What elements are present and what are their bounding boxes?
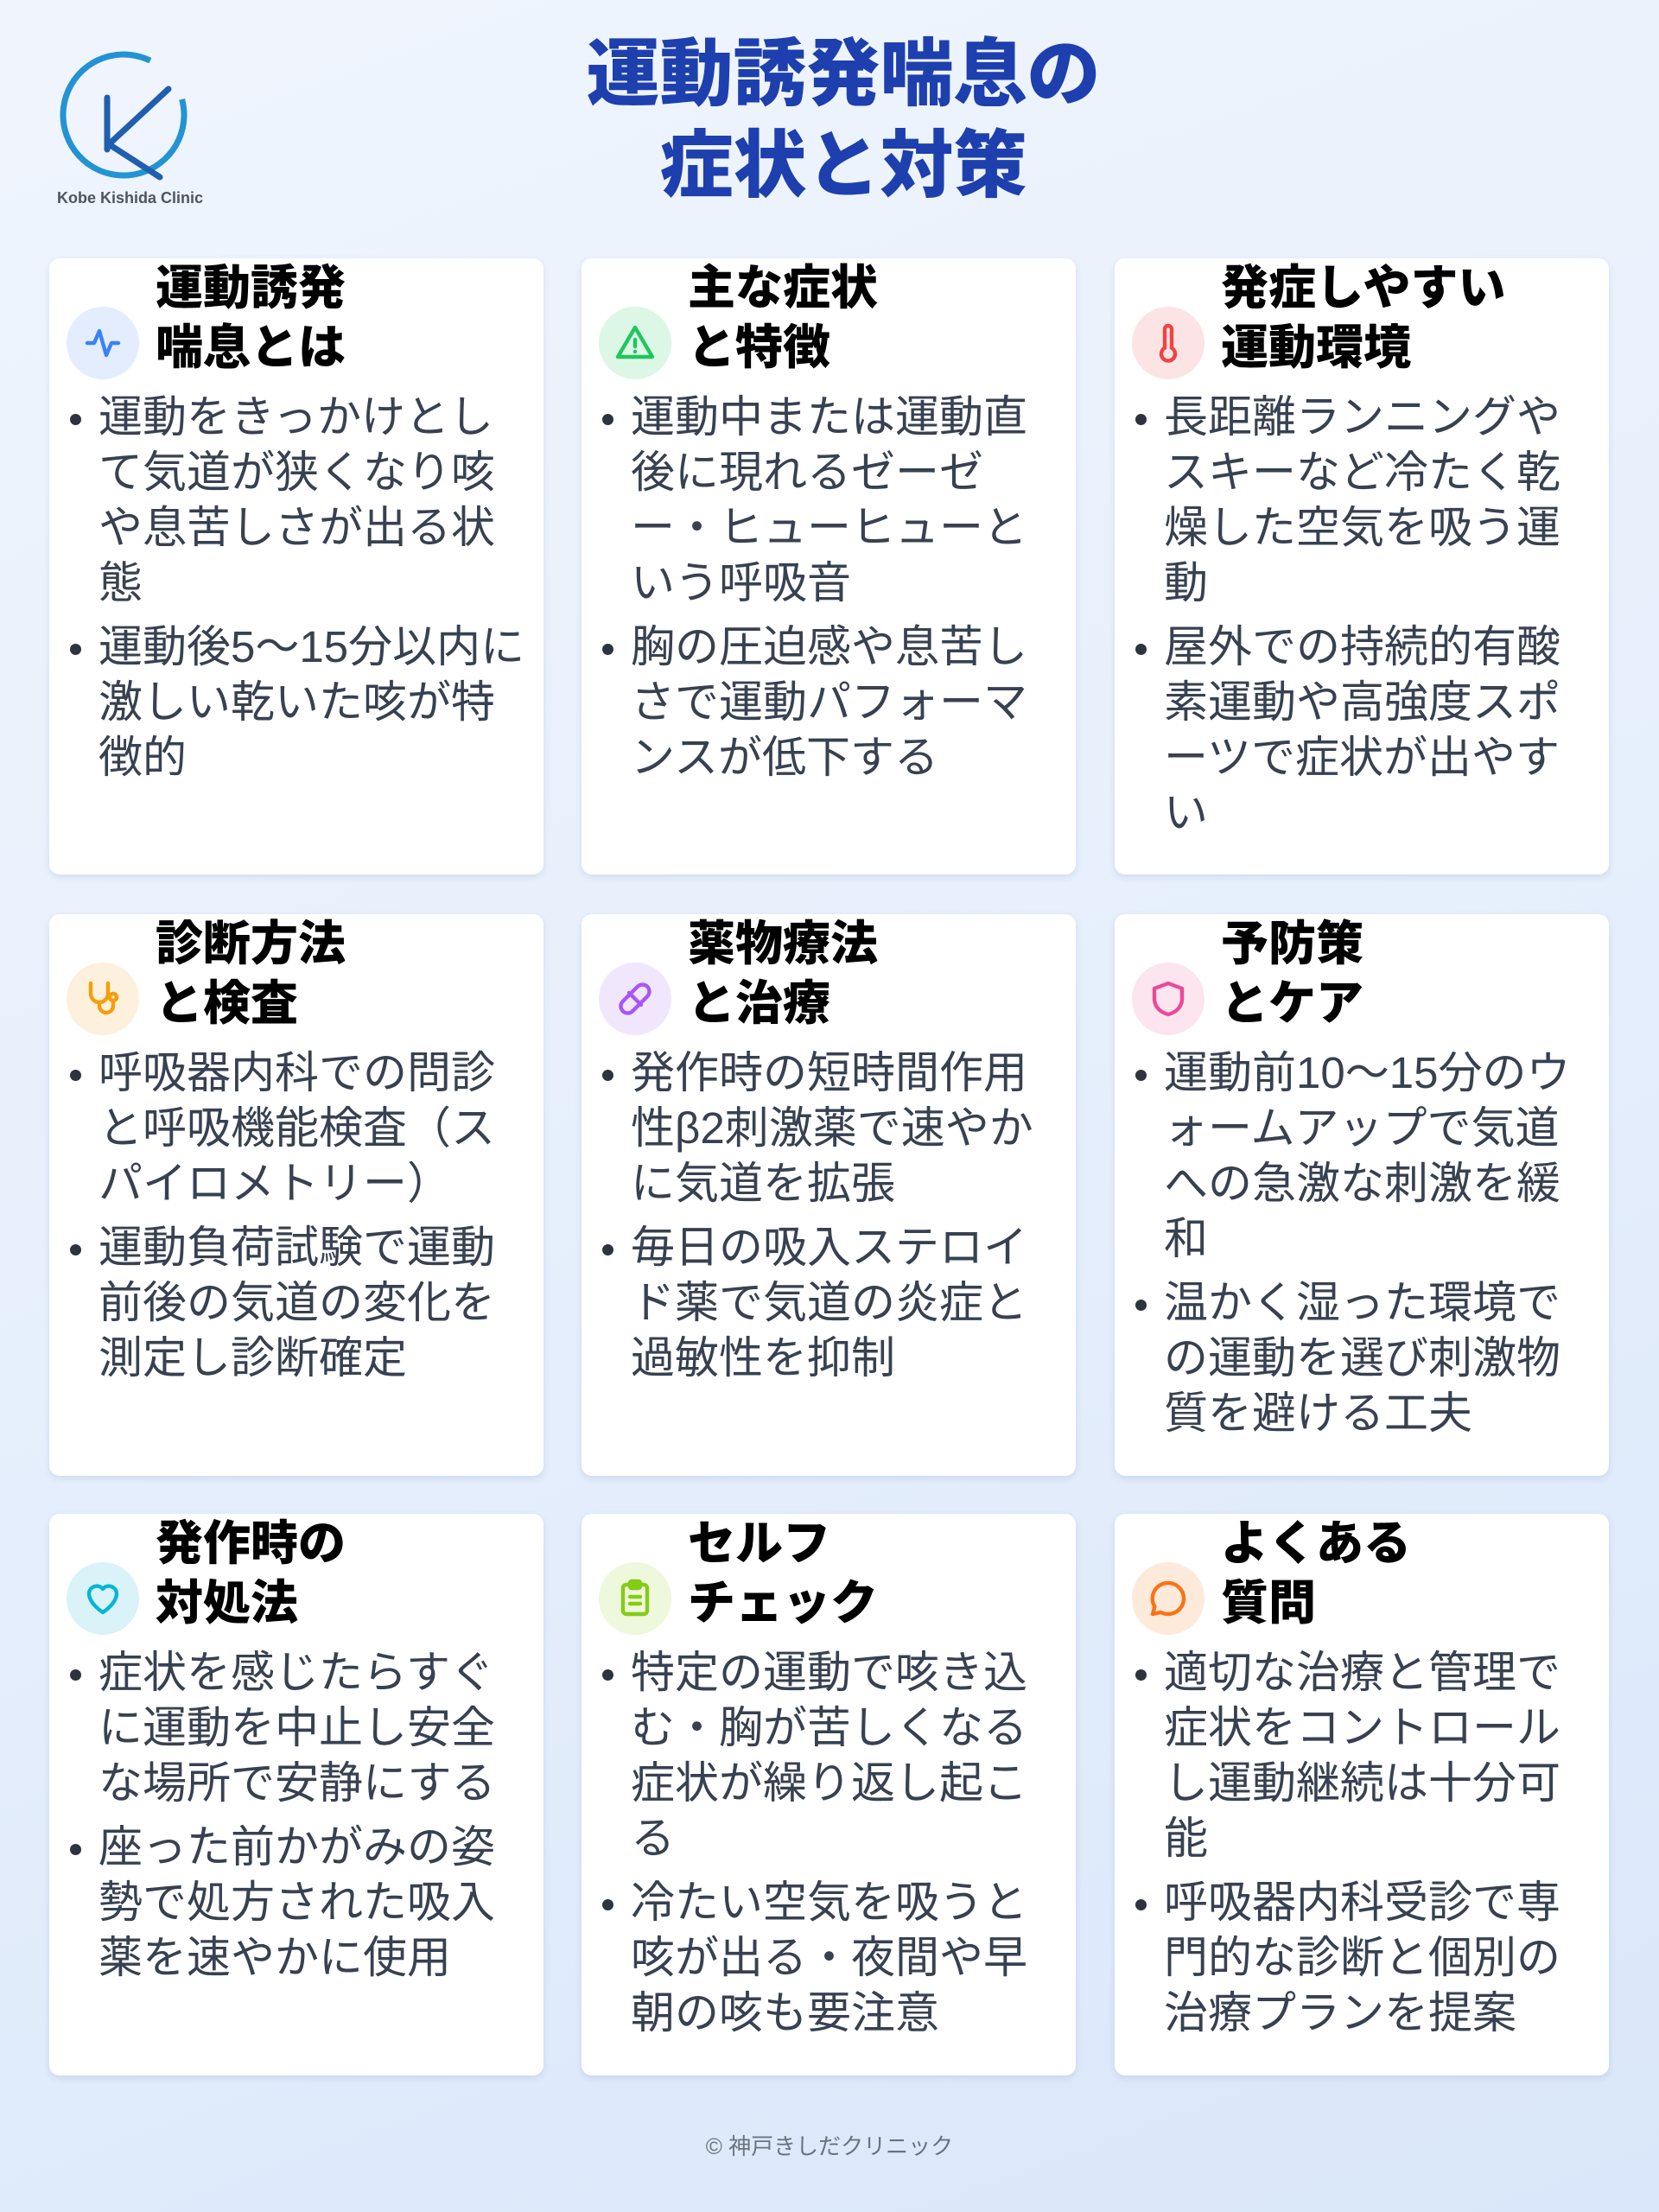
bullets: る	[631, 1814, 675, 1863]
bullets: 朝の咳も要注意	[631, 1988, 939, 2037]
icon: pill	[599, 963, 671, 1035]
bullets: 温かく湿った環境で	[1164, 1278, 1560, 1327]
bullets	[70, 392, 524, 782]
logo	[57, 52, 203, 207]
title: 症状と対策	[659, 125, 1027, 207]
bullets: 特定の運動で咳き込	[631, 1648, 1027, 1697]
bullets: 症状を感じたらすぐ	[99, 1648, 494, 1697]
bullets: 胸の圧迫感や息苦し	[631, 622, 1027, 671]
heading: よくある	[1221, 1516, 1411, 1570]
heading	[688, 1516, 878, 1630]
bullets: に気道を拡張	[631, 1159, 895, 1208]
bullets: て気道が狭くなり咳	[99, 448, 495, 497]
title: 運動誘発喘息の	[586, 34, 1101, 116]
panel: 診断方法と検査	[49, 914, 543, 1476]
bullets: への急激な刺激を緩	[1164, 1159, 1560, 1208]
bullets: 屋外での持続的有酸	[1164, 622, 1560, 671]
panel: 予防策とケア	[1115, 914, 1609, 1476]
icon: clipboard	[599, 1562, 671, 1635]
heading: 発症しやすい	[1221, 261, 1505, 315]
icon: chat	[1132, 1562, 1205, 1635]
logo: Kobe Kishida Clinic	[57, 189, 203, 207]
icon: stethoscope	[67, 963, 139, 1035]
icon: heart	[67, 1562, 139, 1635]
heading: 対処法	[156, 1576, 298, 1630]
bullets: 運動前10〜15分のウ	[1164, 1048, 1570, 1097]
bullets: 和	[1164, 1214, 1208, 1263]
bullets: ー・ヒューヒューと	[631, 503, 1027, 552]
bullets: 過敏性を抑制	[631, 1333, 895, 1382]
icon: shield	[1132, 963, 1205, 1035]
panel: 運動誘発喘息とは	[49, 258, 543, 874]
bullets: 症状が繰り返し起こ	[631, 1758, 1027, 1808]
bullets	[70, 1648, 496, 1982]
heading	[156, 1516, 346, 1630]
heading: と特徴	[688, 321, 830, 374]
heading: と治療	[688, 976, 830, 1030]
heading: 診断方法	[156, 917, 346, 970]
bullets: い	[1164, 788, 1208, 837]
bullets: 呼吸器内科での問診	[99, 1048, 495, 1097]
title	[586, 34, 1101, 207]
bullets	[602, 1648, 1027, 2037]
footer: © 神戸きしだクリニック	[706, 2133, 953, 2159]
heading	[688, 917, 878, 1030]
heading: 質問	[1221, 1576, 1316, 1630]
bullets: パイロメトリー）	[99, 1159, 451, 1208]
bullets: に運動を中止し安全	[99, 1703, 495, 1752]
bullets	[602, 392, 1027, 782]
heading	[1221, 917, 1363, 1030]
bullets: 激しい乾いた咳が特	[99, 677, 495, 727]
bullets: し運動継続は十分可	[1164, 1758, 1560, 1808]
panel: 発作時の対処法	[49, 1514, 543, 2075]
heading: 運動誘発	[156, 261, 346, 315]
heading	[1221, 1516, 1411, 1630]
icon: pulse	[67, 307, 139, 379]
bullets: 後に現れるゼーゼ	[631, 448, 983, 497]
bullets: 咳が出る・夜間や早	[631, 1933, 1027, 1982]
bullets: 勢で処方された吸入	[99, 1878, 495, 1927]
panel: よくある質問	[1115, 1514, 1609, 2075]
bullets: 態	[99, 558, 143, 607]
heading	[1221, 261, 1505, 374]
bullets: や息苦しさが出る状	[99, 503, 495, 552]
bullets: 能	[1164, 1814, 1208, 1863]
bullets: いう呼吸音	[631, 558, 851, 607]
bullets: 運動をきっかけとし	[99, 392, 493, 442]
bullets: 毎日の吸入ステロイ	[631, 1223, 1027, 1272]
bullets: 長距離ランニングや	[1164, 392, 1560, 442]
bullets: 燥した空気を吸う運	[1164, 503, 1560, 552]
bullets: な場所で安静にする	[99, 1758, 496, 1808]
bullets: ンスが低下する	[631, 733, 938, 782]
bullets: 呼吸器内科受診で専	[1164, 1878, 1560, 1927]
bullets: さで運動パフォーマ	[631, 677, 1027, 727]
heading: 運動環境	[1221, 321, 1411, 374]
heading: と検査	[156, 976, 298, 1030]
heading: 発作時の	[156, 1516, 346, 1570]
heading	[156, 917, 346, 1030]
bullets: スキーなど冷たく乾	[1164, 448, 1560, 497]
heading: セルフ	[688, 1516, 830, 1570]
bullets: 冷たい空気を吸うと	[631, 1878, 1027, 1927]
bullets: 治療プランを提案	[1164, 1988, 1516, 2037]
bullets	[70, 1048, 495, 1382]
bullets	[1135, 1648, 1560, 2037]
bullets	[1135, 1048, 1570, 1438]
bullets: 測定し診断確定	[99, 1333, 407, 1382]
heading: チェック	[688, 1576, 878, 1630]
heading	[688, 261, 878, 374]
heading: 喘息とは	[156, 321, 346, 374]
bullets: 運動後5〜15分以内に	[99, 622, 524, 671]
bullets: 質を避ける工夫	[1164, 1389, 1472, 1438]
bullets: 症状をコントロール	[1164, 1703, 1560, 1752]
bullets: 運動中または運動直	[631, 392, 1027, 442]
heading: 薬物療法	[688, 917, 878, 970]
bullets: 前後の気道の変化を	[99, 1278, 495, 1327]
bullets: ォームアップで気道	[1164, 1103, 1559, 1153]
panel: 発症しやすい運動環境	[1115, 258, 1609, 874]
bullets: 座った前かがみの姿	[99, 1822, 495, 1872]
bullets: む・胸が苦しくなる	[631, 1703, 1027, 1752]
icon: warning	[599, 307, 671, 379]
bullets	[1135, 392, 1560, 837]
bullets: ーツで症状が出やす	[1164, 733, 1560, 782]
bullets: 発作時の短時間作用	[631, 1048, 1027, 1097]
heading	[156, 261, 346, 374]
panel: 薬物療法と治療	[582, 914, 1076, 1476]
bullets: 薬を速やかに使用	[99, 1933, 451, 1982]
bullets: 運動負荷試験で運動	[99, 1223, 495, 1272]
bullets: の運動を選び刺激物	[1164, 1333, 1560, 1382]
heading: 主な症状	[688, 261, 878, 315]
heading: 予防策	[1221, 917, 1363, 970]
bullets	[602, 1048, 1033, 1382]
heading: とケア	[1221, 976, 1363, 1030]
icon: thermometer	[1132, 307, 1205, 379]
bullets: 動	[1164, 558, 1208, 607]
bullets: 性β2刺激薬で速やか	[631, 1103, 1033, 1153]
bullets: 門的な診断と個別の	[1164, 1933, 1560, 1982]
panel: 主な症状と特徴	[582, 258, 1076, 874]
bullets: 素運動や高強度スポ	[1164, 677, 1560, 727]
panel: セルフチェック	[582, 1514, 1076, 2075]
bullets: 適切な治療と管理で	[1164, 1648, 1560, 1697]
bullets: ド薬で気道の炎症と	[631, 1278, 1027, 1327]
bullets: 徴的	[99, 733, 187, 782]
bullets: と呼吸機能検査（ス	[99, 1103, 495, 1153]
